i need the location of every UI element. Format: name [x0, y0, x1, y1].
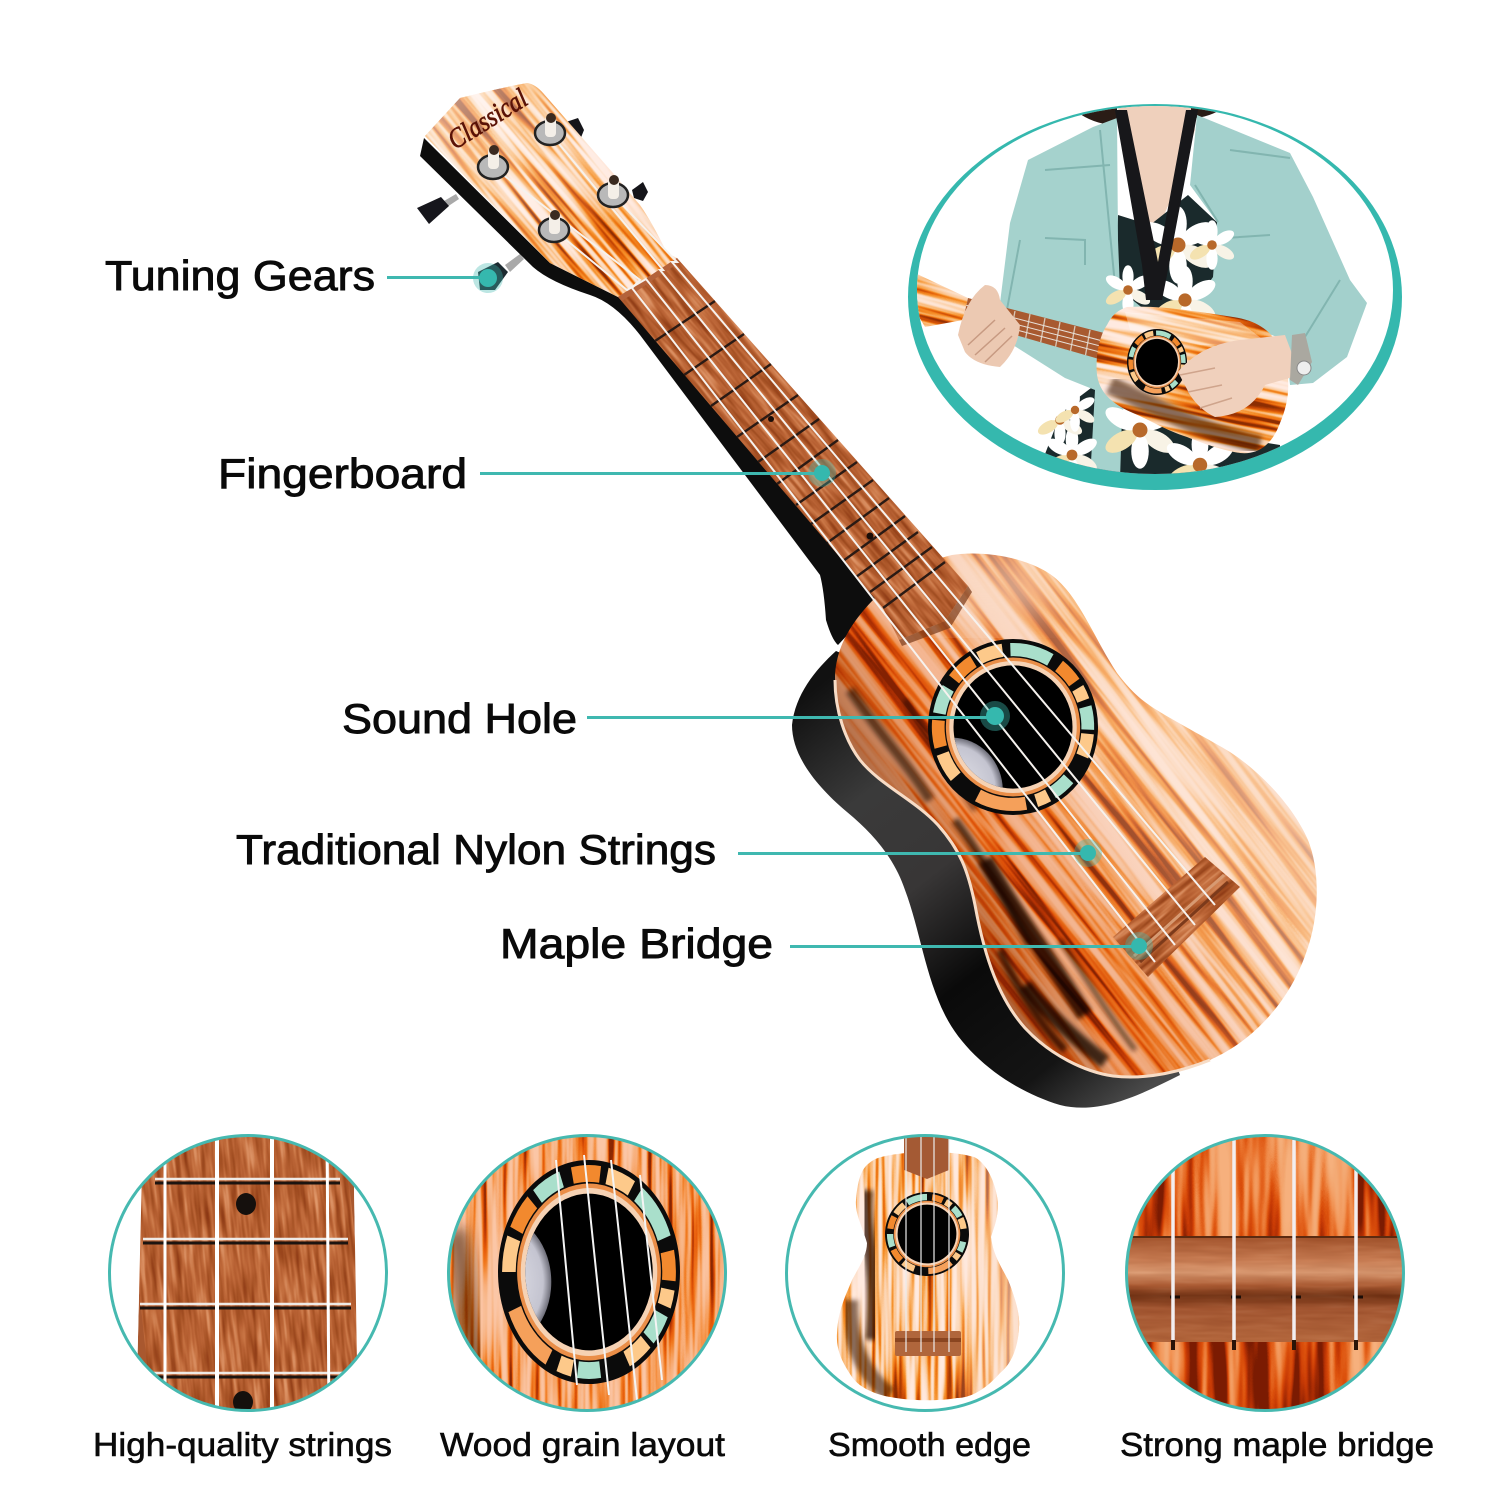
bridge	[895, 1331, 961, 1356]
strings	[165, 1130, 329, 1420]
string slots	[1170, 1296, 1363, 1298]
bridge block	[1120, 1236, 1410, 1342]
callout: Maple Bridge	[500, 920, 1153, 967]
jacket right	[1180, 115, 1367, 385]
jacket left	[1000, 118, 1145, 480]
body cream binding	[835, 680, 1210, 1077]
rosette	[885, 1192, 969, 1276]
tuner knobs behind headstock	[417, 118, 648, 290]
callout: Fingerboard: Fingerboard	[218, 450, 467, 497]
nylon strings	[493, 133, 1215, 962]
inset: high-quality strings	[108, 1134, 388, 1412]
right forearm and hand	[1178, 335, 1300, 417]
headstock logo: Classical	[442, 83, 533, 156]
fret dots	[236, 1193, 256, 1215]
neck	[904, 1137, 948, 1179]
left hand	[958, 285, 1020, 367]
frets	[140, 1183, 351, 1377]
inset: smooth edge	[785, 1130, 1065, 1413]
bridge	[1113, 857, 1240, 977]
dress top	[1118, 195, 1217, 308]
caption: wood grain layout: Wood grain layout	[440, 1426, 725, 1463]
body top wood	[835, 554, 1317, 1076]
black body side	[792, 651, 1180, 1108]
mini ukulele body	[1096, 306, 1288, 454]
callout: Tuning Gears	[105, 252, 503, 299]
callout: Sound Hole: Sound Hole	[342, 695, 577, 742]
callout: Traditional Nylon Strings: Traditional Nylon Strings	[236, 826, 716, 873]
tuning pegs	[478, 113, 628, 242]
strings	[906, 1130, 949, 1352]
floral print	[1038, 206, 1234, 474]
caption: strong maple bridge: Strong maple bridge	[1120, 1426, 1434, 1463]
mini ukulele headstock	[917, 274, 968, 327]
ukulele main product	[417, 83, 1405, 1412]
dress lower	[1045, 388, 1280, 474]
neck strap	[1115, 110, 1198, 300]
inset: strong maple bridge	[1125, 1134, 1405, 1412]
strings	[1173, 1140, 1356, 1340]
caption: high-quality strings: High-quality strings	[93, 1426, 392, 1463]
photo: woman playing the ukulele	[908, 104, 1402, 490]
callout: Fingerboard	[218, 450, 836, 497]
caption: smooth edge: Smooth edge	[828, 1426, 1031, 1463]
callout: Tuning Gears: Tuning Gears	[105, 252, 375, 299]
black neck and headstock side	[420, 138, 880, 645]
jacket seams and folds	[1005, 130, 1340, 345]
mini ukulele body	[836, 1152, 1020, 1400]
watch	[1290, 333, 1312, 385]
sound hole ring	[901, 618, 1119, 843]
mini sound hole	[1127, 329, 1187, 395]
headstock wood	[425, 83, 677, 297]
hair	[1082, 108, 1216, 124]
inset: wood grain layout	[447, 1134, 727, 1412]
strings	[556, 1155, 662, 1400]
callout: Sound Hole	[342, 695, 1010, 742]
frets	[655, 301, 945, 608]
neck and chest skin	[1118, 106, 1195, 222]
fingerboard	[618, 258, 968, 640]
nut	[618, 258, 680, 301]
callout: Maple Bridge: Maple Bridge	[500, 920, 773, 967]
callout: Traditional Nylon Strings	[236, 826, 1102, 873]
teal oval frame	[908, 104, 1402, 490]
fingerboard shadow tab	[899, 586, 972, 646]
mini ukulele neck	[964, 298, 1103, 358]
fingerboard inlay dots	[768, 416, 874, 540]
rosette	[498, 1160, 680, 1384]
